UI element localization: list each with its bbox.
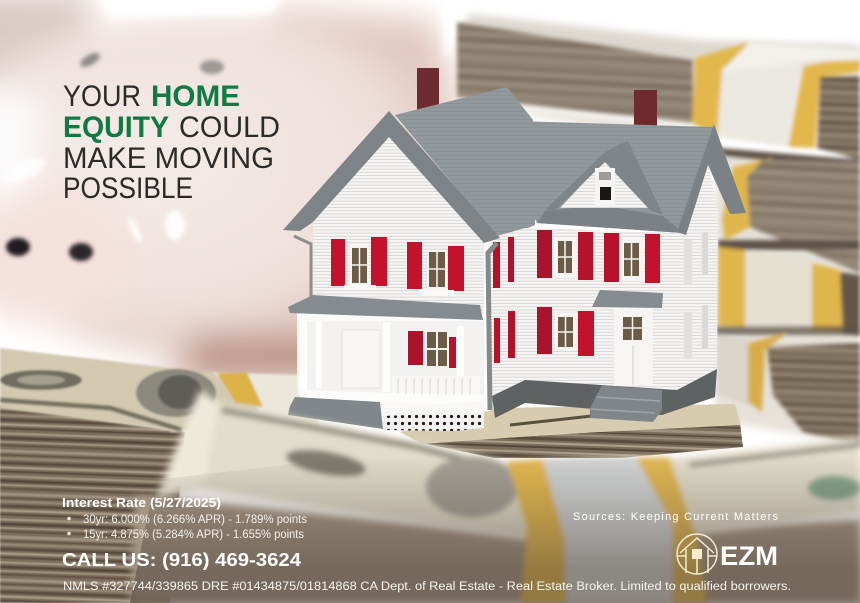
call to action phone number: CALL US: (916) 469-3624: [62, 549, 302, 570]
right wing wall: [525, 228, 677, 390]
title: YOUR: [63, 80, 141, 113]
background: blurred stacks of cash on the right: [450, 14, 860, 445]
right wing windows: [537, 230, 708, 358]
title: MAKE MOVING: [63, 142, 274, 175]
upper shutters and windows: [331, 237, 515, 363]
background: left stack of cash: [0, 348, 320, 603]
sources: Sources: Keeping Current Matters: [573, 511, 778, 523]
title: COULD: [179, 111, 280, 144]
downspout: [488, 243, 497, 410]
gutter: [294, 236, 311, 297]
legal disclaimer: NMLS #327744/339865 DRE #01434875/01814868 CA Dept. of Real Estate - Real Estate Broker. Limited to qualified borrowers.: [63, 581, 791, 593]
front porch: [288, 295, 484, 431]
side door and awning: [592, 290, 663, 386]
rate bullets: 30yr: 6.000% (6.266% APR) - 1.789% points: [83, 514, 307, 526]
title: [63, 80, 280, 205]
front gable wall: [313, 122, 484, 393]
interest rate block: Interest Rate (5/27/2025): [62, 495, 221, 510]
miniature house: [283, 68, 746, 431]
interest rate block: [62, 495, 307, 541]
rate bullets: [67, 514, 307, 541]
middle wall: [490, 228, 525, 400]
rate bullets: 15yr: 4.875% (5.284% APR) - 1.655% points: [83, 529, 304, 541]
chimneys: [417, 68, 657, 128]
right side wall: [677, 165, 718, 390]
front steps: [288, 397, 383, 429]
side wing roof: [483, 120, 713, 233]
icon: house in circle: [677, 534, 717, 574]
foreground: blurred cash bundle: [130, 390, 860, 603]
side steps: [590, 385, 662, 422]
right eave trim: [677, 124, 746, 235]
dormer: [537, 141, 683, 233]
title: HOME: [151, 80, 240, 113]
title: POSSIBLE: [63, 172, 193, 205]
cash stack under house: [400, 404, 743, 458]
EZM logo: EZM: [720, 541, 778, 571]
EZM logo: [677, 534, 778, 574]
main roof: [395, 87, 535, 240]
foundation: [492, 369, 717, 418]
title: EQUITY: [63, 111, 169, 144]
front gable trim: [283, 111, 500, 243]
